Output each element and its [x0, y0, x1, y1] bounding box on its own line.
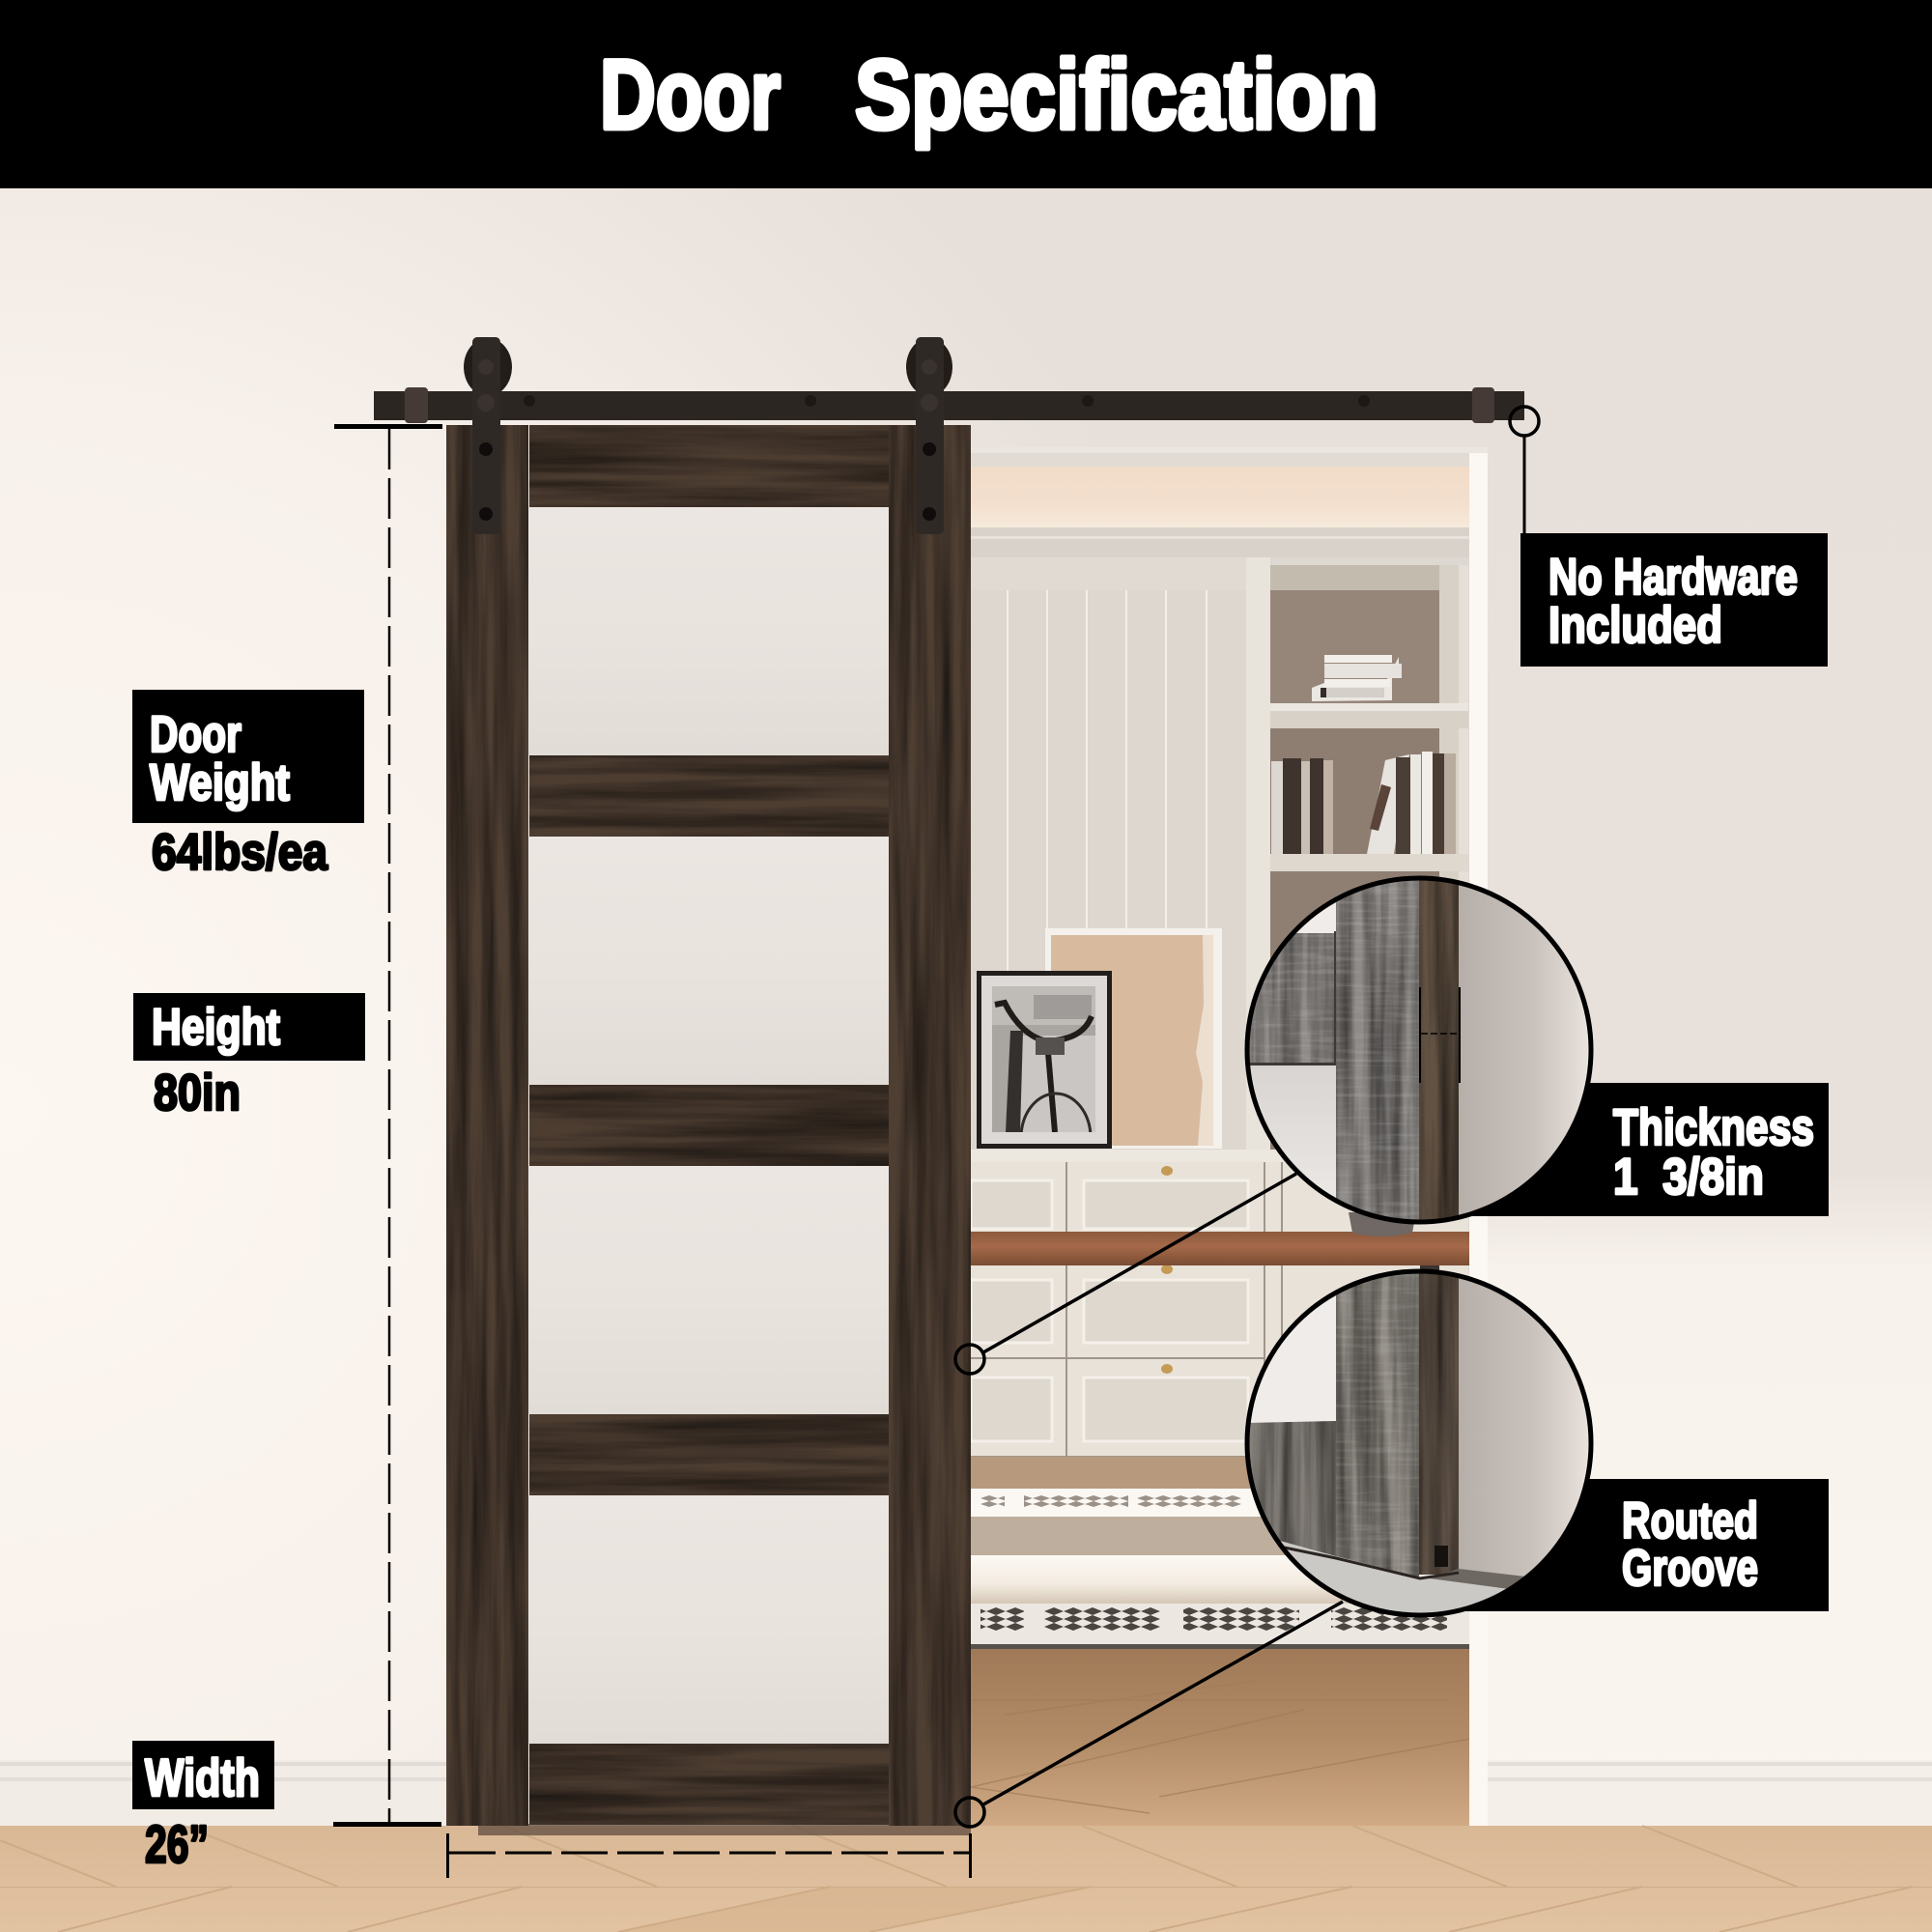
room back wall and frame [971, 447, 1469, 1826]
width value: 26” [145, 1814, 209, 1874]
doorway with room scene [971, 447, 1488, 1826]
thickness text: Thickness [1613, 1099, 1814, 1156]
baseboards [0, 1760, 1932, 1826]
label: height [133, 993, 365, 1061]
height text: Height [152, 999, 280, 1056]
door jamb [971, 447, 1488, 1826]
label: routed groove [1449, 1479, 1829, 1611]
books [1271, 655, 1456, 854]
no hardware text: No Hardware [1548, 549, 1798, 606]
width text: Width [145, 1747, 260, 1807]
label: no hardware included [1520, 533, 1828, 667]
groove text: Groove [1622, 1540, 1758, 1597]
door shadow on floor [478, 1824, 971, 1835]
barn door [446, 425, 971, 1826]
door stiles [446, 425, 971, 1826]
weight text: Weight [150, 754, 290, 811]
callout line: thickness [955, 1174, 1296, 1374]
height value: 80in [154, 1065, 241, 1122]
label: thickness [1449, 1083, 1829, 1216]
barn door track [374, 387, 1524, 423]
width dimension line [446, 1833, 972, 1878]
door rails [529, 425, 889, 1825]
callout line: routed groove [955, 1602, 1343, 1827]
door weight value: 64lbs/ea [152, 824, 327, 881]
left hanger [464, 337, 512, 534]
title word: Specification: Specification [855, 40, 1378, 150]
bookshelf [1270, 565, 1468, 1159]
label: door weight [132, 690, 364, 823]
title bar [0, 0, 1932, 188]
included text: Included [1548, 597, 1722, 654]
rug and inner floor [971, 1457, 1469, 1826]
door text: Door [150, 706, 242, 763]
title word: Door: Door [600, 40, 781, 150]
callout line: hardware [1510, 407, 1539, 533]
detail circle: routed groove [1245, 1269, 1593, 1617]
right hanger [906, 337, 952, 534]
thickness value: 1 3/8in [1613, 1149, 1764, 1206]
cabinets and counter [971, 1150, 1469, 1459]
floor [0, 1826, 1932, 1932]
routed text: Routed [1622, 1492, 1758, 1549]
detail circle: thickness [1244, 876, 1592, 1224]
label: width [132, 1741, 274, 1809]
height dimension line [333, 424, 442, 1827]
framed pictures [977, 928, 1222, 1149]
door panes [528, 507, 890, 1744]
